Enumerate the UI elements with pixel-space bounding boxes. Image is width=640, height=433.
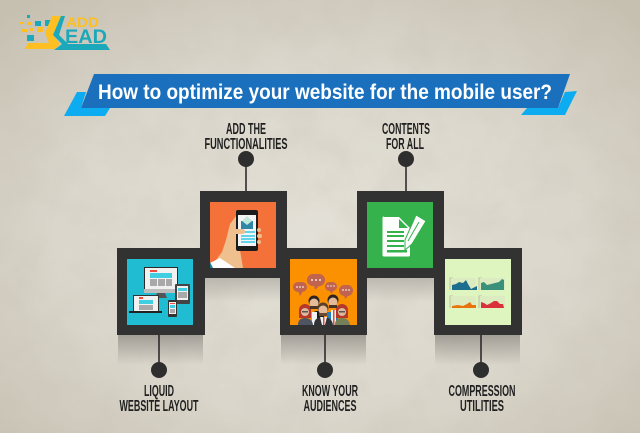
connector: compression utilities [473,334,489,378]
icon: cuff [210,258,235,268]
icon: phone [168,300,177,317]
chart: green area [481,279,504,290]
panel: contents icon [367,202,433,268]
panel: liquid website layout icon [127,259,193,325]
panel: functionalities icon [210,202,276,268]
chart: blue area [452,280,477,290]
panel: audiences icon [290,259,357,325]
logo [20,14,110,50]
icon: phone with mail [236,210,258,251]
logo text: ADD [66,14,99,30]
title banner [64,74,577,116]
icon: tablet [175,284,190,304]
logo: EAD [65,27,107,48]
frame shadows [118,278,520,365]
label: liquid website layout: LIQUID [144,383,174,400]
chart: red area [481,301,504,308]
icon: hand [216,216,243,268]
label: know your audiences: AUDIENCES [304,398,357,415]
label: compression utilities: UTILITIES [460,398,504,415]
connector: add the functionalities [238,151,254,192]
connector: know your audiences [317,334,333,378]
icon: monitor [144,267,178,298]
connector: contents for all [398,151,414,192]
label: liquid website layout: WEBSITE LAYOUT [120,398,199,415]
icon: people [298,294,350,325]
label: compression utilities: COMPRESSION [448,383,516,400]
frames [117,191,522,335]
connector: liquid website layout [151,334,167,378]
icon: fingers [233,228,262,244]
label: add the functionalities: FUNCTIONALITIES [204,136,288,153]
icon: pencil [405,215,426,250]
charts [450,278,505,308]
icon: speech bubbles [293,274,353,299]
label: contents for all: FOR ALL [386,136,424,153]
label: add the functionalities: ADD THE [226,121,266,138]
title: How to optimize your website for the mobile user? [98,81,552,104]
panel: compression icon [445,259,511,325]
icon: document [382,216,410,256]
label: know your audiences: KNOW YOUR [302,383,358,400]
chart: orange area [452,302,476,308]
icon: laptop [129,295,162,313]
label: contents for all: CONTENTS [382,121,430,138]
